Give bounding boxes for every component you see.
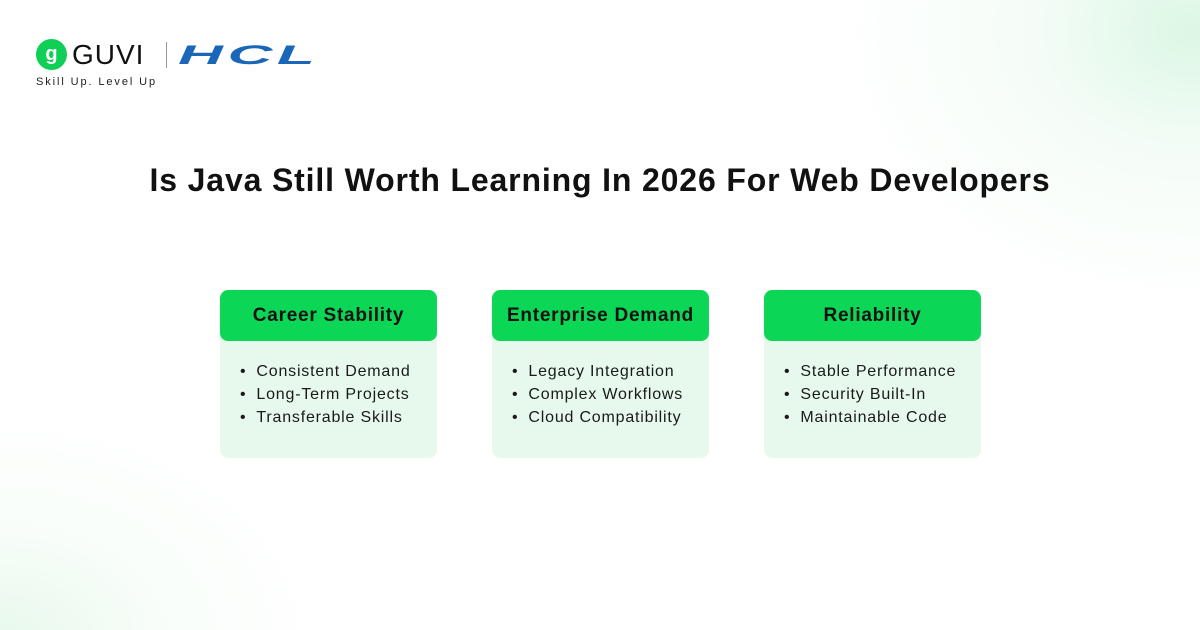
panel: career stability: Long-Term Projects [256, 386, 410, 403]
panel: career stability: Career Stability [253, 304, 404, 326]
panel: enterprise demand: Legacy Integration [528, 363, 674, 380]
panel: enterprise demand: Complex Workflows [528, 386, 683, 403]
panel: reliability: Stable Performance [800, 363, 956, 380]
panel: reliability: Reliability [824, 304, 922, 326]
panel: career stability [220, 290, 437, 458]
logo [36, 39, 319, 88]
guvi wordmark: GUVI [72, 39, 144, 70]
panel: enterprise demand [492, 290, 709, 458]
panel: enterprise demand: Enterprise Demand [507, 304, 694, 326]
icon: guvi: g [45, 43, 58, 65]
icon: guvi [36, 39, 67, 70]
panel: reliability: Maintainable Code [800, 409, 947, 426]
panel: reliability: Security Built-In [800, 386, 926, 403]
panel: reliability [764, 290, 981, 458]
hcl wordmark: HCL [178, 40, 319, 70]
panel: career stability: Consistent Demand [256, 363, 411, 380]
title: Is Java Still Worth Learning In 2026 For Web Developers [150, 162, 1050, 198]
tagline: Skill Up. Level Up [36, 76, 157, 88]
panel: career stability: Transferable Skills [256, 409, 403, 426]
panel: enterprise demand: Cloud Compatibility [528, 409, 681, 426]
